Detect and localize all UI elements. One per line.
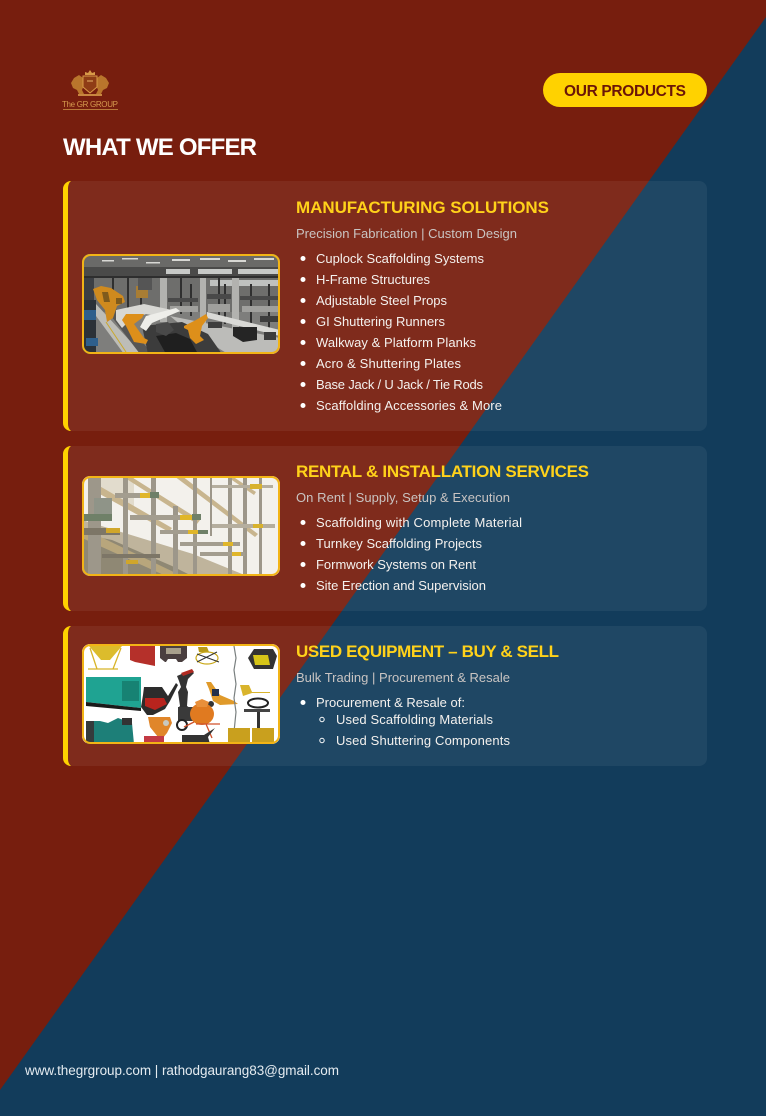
heading: USED EQUIPMENT – BUY & SELL bbox=[296, 642, 559, 661]
bullet list: Scaffolding with Complete Material bbox=[316, 515, 522, 530]
image: factory floor bbox=[82, 254, 280, 354]
bullet list: GI Shuttering Runners bbox=[316, 314, 446, 329]
bullet list: Base Jack / U Jack / Tie Rods bbox=[316, 377, 484, 392]
bullet list: Procurement & Resale of: bbox=[316, 695, 465, 710]
bullet list: H-Frame Structures bbox=[316, 272, 430, 287]
bullet list: Acro & Shuttering Plates bbox=[316, 356, 462, 371]
bullet list: Turnkey Scaffolding Projects bbox=[316, 536, 482, 551]
panel: rental and installation services bbox=[63, 446, 707, 611]
bullet list: Used Scaffolding Materials bbox=[336, 712, 494, 727]
heading: RENTAL & INSTALLATION SERVICES bbox=[296, 462, 589, 481]
bullet list: Adjustable Steel Props bbox=[316, 293, 448, 308]
image: construction equipment bbox=[82, 644, 280, 744]
bullet list bbox=[300, 251, 502, 413]
subheading: On Rent | Supply, Setup & Execution bbox=[296, 490, 510, 505]
bullet list bbox=[300, 695, 510, 748]
bullet list bbox=[300, 515, 522, 593]
footer contact line: www.thegrgroup.com | rathodgaurang83@gmail.com bbox=[24, 1063, 339, 1078]
bullet list: Site Erection and Supervision bbox=[316, 578, 486, 593]
badge: our products bbox=[543, 73, 707, 107]
bullet list: Formwork Systems on Rent bbox=[316, 557, 476, 572]
heading: MANUFACTURING SOLUTIONS bbox=[296, 198, 549, 217]
panel: used equipment bbox=[63, 626, 707, 766]
subheading: Precision Fabrication | Custom Design bbox=[296, 226, 517, 241]
subheading: Bulk Trading | Procurement & Resale bbox=[296, 670, 510, 685]
logo: The GR GROUP bbox=[62, 100, 118, 109]
bullet list: Cuplock Scaffolding Systems bbox=[316, 251, 484, 266]
logo bbox=[62, 70, 118, 110]
bullet list: Used Shuttering Components bbox=[336, 733, 510, 748]
image: scaffolding bbox=[82, 476, 280, 576]
badge: our products: OUR PRODUCTS bbox=[564, 83, 686, 100]
title: WHAT WE OFFER bbox=[63, 134, 257, 161]
bullet list: Walkway & Platform Planks bbox=[316, 335, 476, 350]
bullet list: Scaffolding Accessories & More bbox=[316, 398, 502, 413]
panel: manufacturing solutions bbox=[63, 181, 707, 431]
